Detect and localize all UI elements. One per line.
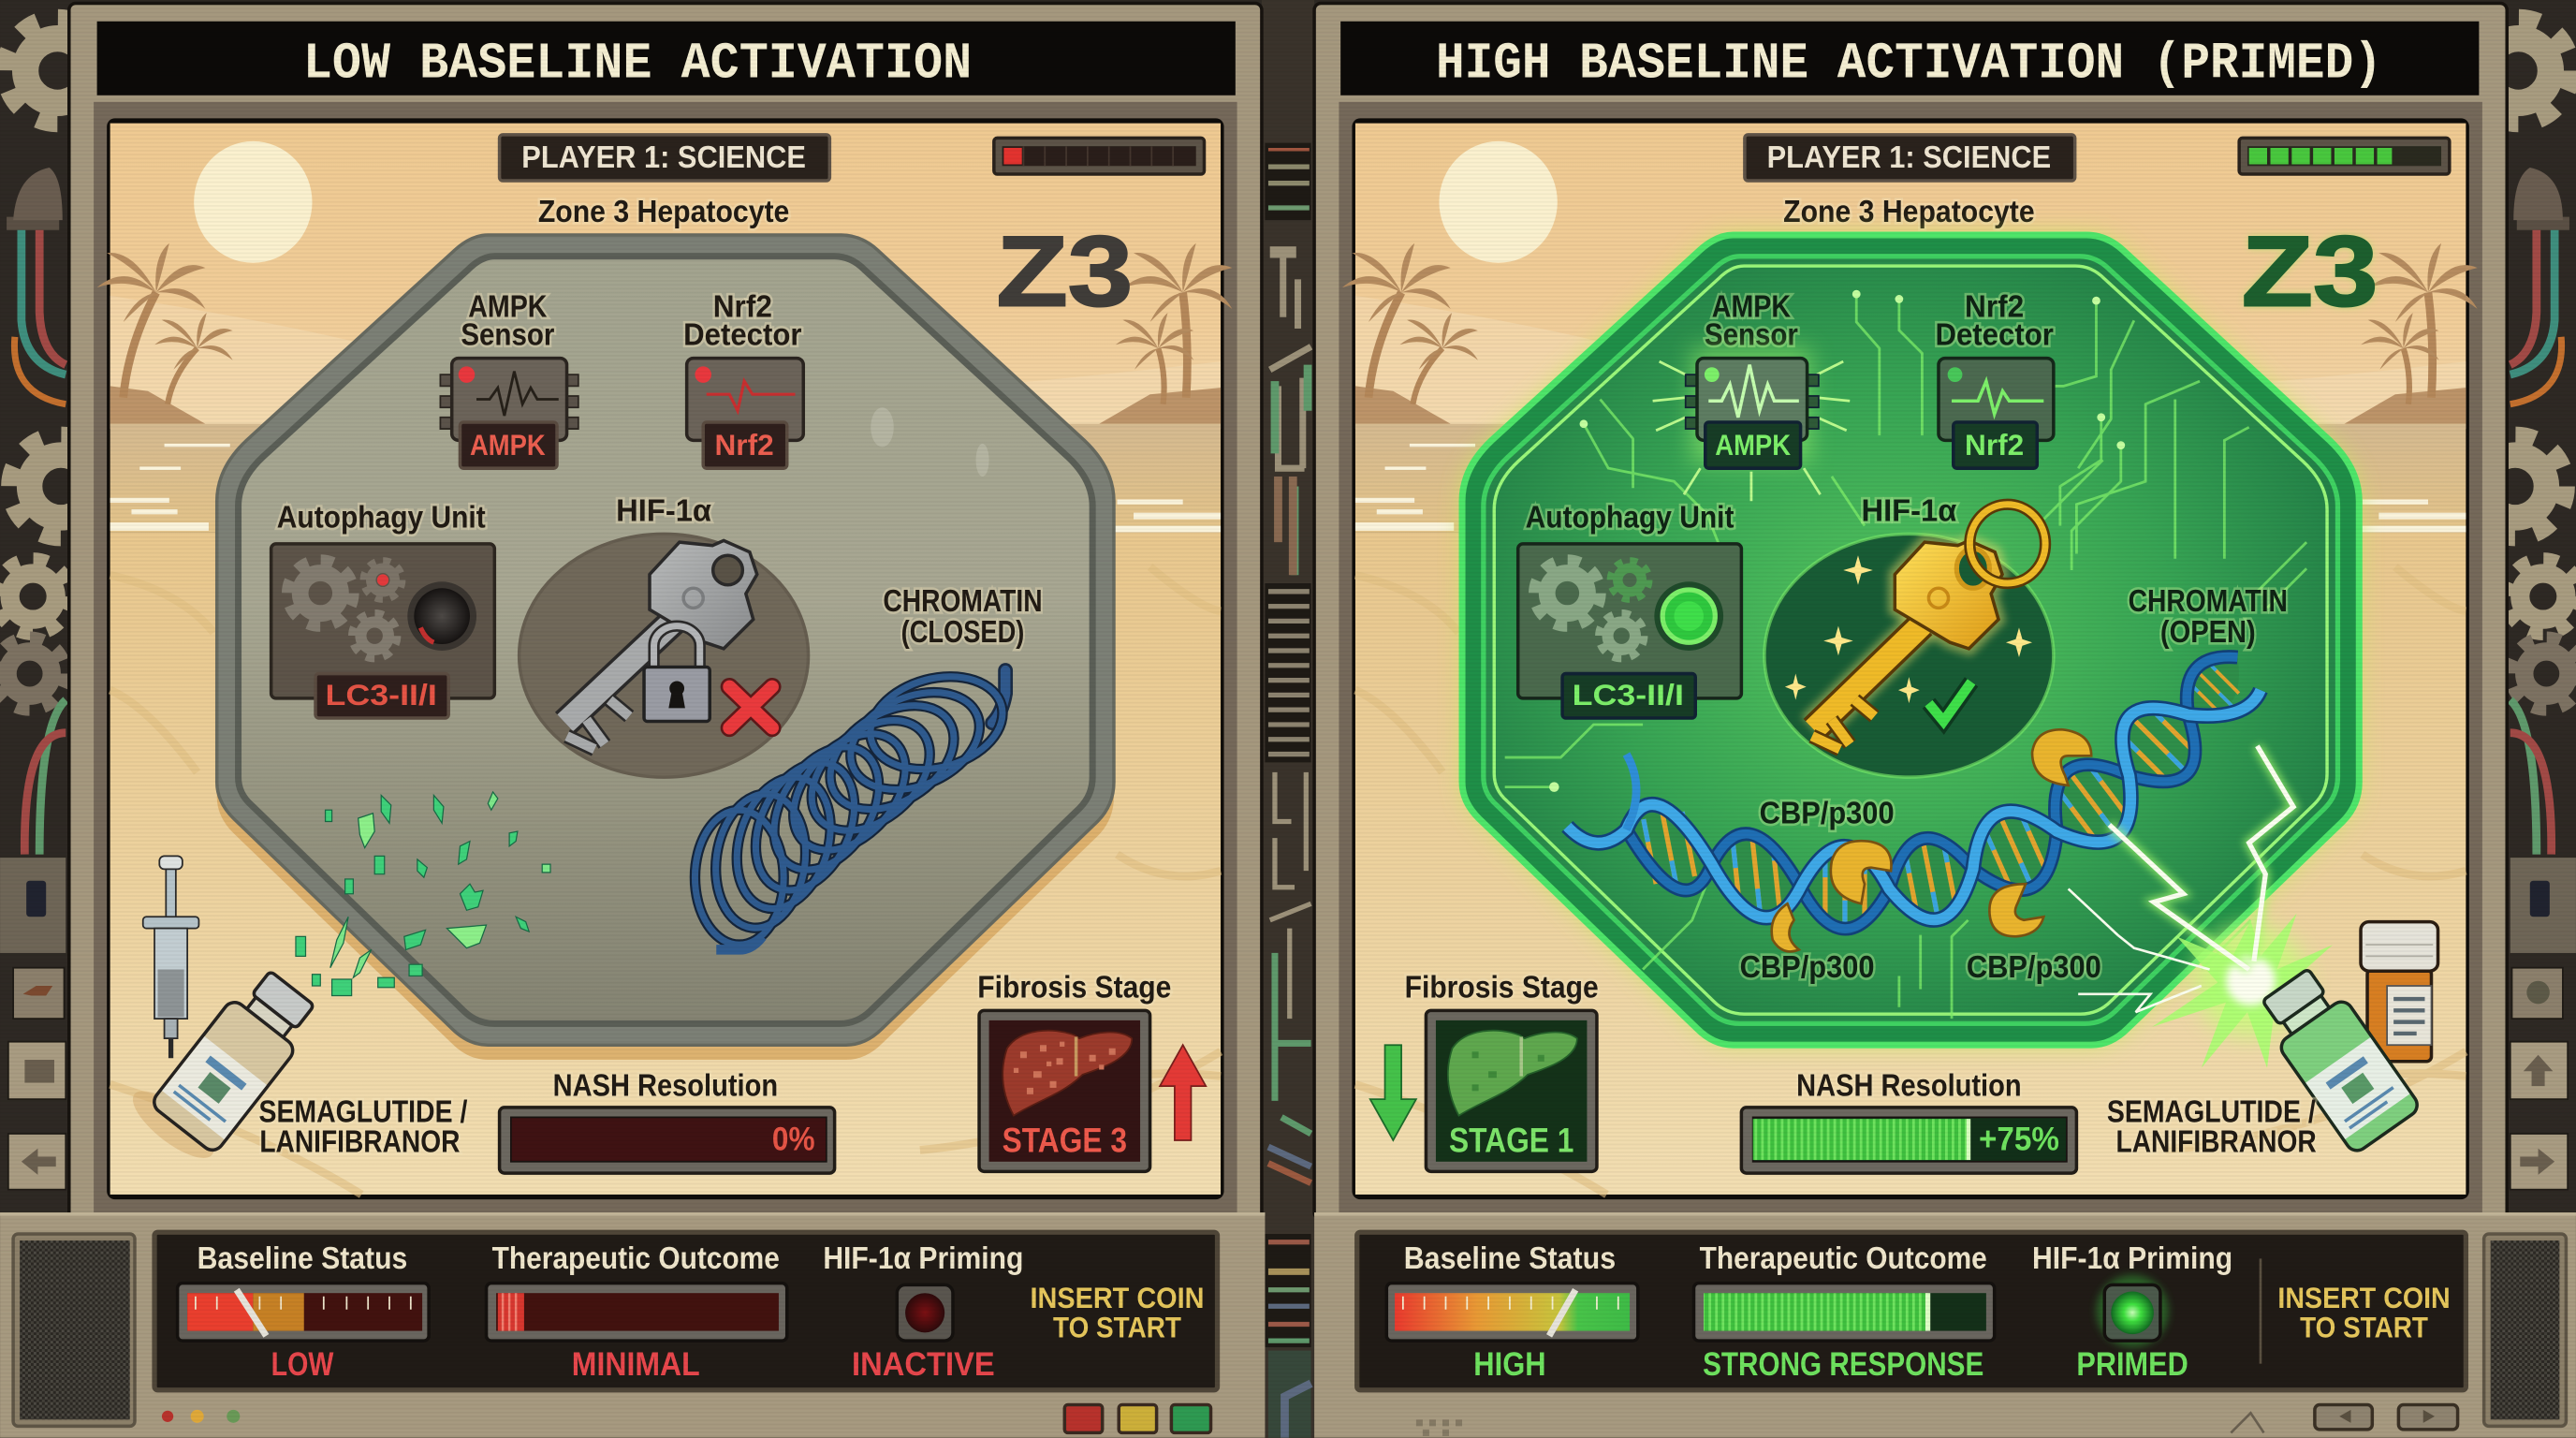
sensor: Nrf2: Nrf2 [714,428,774,462]
speaker: right [2484,1234,2566,1426]
icon: vial [124,952,325,1170]
label: drugs: LANIFIBRANOR [2116,1124,2317,1159]
fibrosis stage 1 card [1405,970,1599,1171]
NASH resolution meter: +75%: +75% [1979,1122,2059,1158]
HIF-1a locked key [520,493,809,777]
lamp: priming inactive: HIF-1α Priming [823,1241,1023,1276]
CBP/p300 co-activators [1740,729,2101,985]
cabinet frame [1314,4,2576,1438]
title [97,22,1236,95]
right side machinery [2464,18,2576,1190]
label: drugs: SEMAGLUTIDE / [2107,1095,2316,1130]
arrow: fibrosis improving [1370,1045,1416,1140]
icon: pill bottle [2361,922,2438,1062]
fibrosis stage 1 card: STAGE 1 [1449,1121,1573,1159]
player badge: PLAYER 1: SCIENCE [1767,140,2051,175]
meter: therapeutic strong [1693,1241,1995,1383]
hepatocyte cell: dormant [217,235,1114,1060]
player badge: PLAYER 1: SCIENCE [521,140,806,175]
lamp: priming active [2032,1241,2232,1383]
status console [1357,1232,2466,1390]
health bar: low [994,138,1204,174]
left side machinery [0,18,112,1190]
HIF-1a golden key: HIF-1α [1862,493,1957,528]
NASH resolution meter: 0% [500,1069,835,1173]
health bar: high [2239,138,2450,174]
sensor: Nrf2 [683,290,803,468]
sensor: AMPK active [1653,290,1850,501]
gauge: baseline low: LOW [271,1346,334,1383]
autophagy unit: on: Autophagy Unit [1526,500,1734,535]
panel: low baseline [0,4,1265,1438]
chromatin closed coil: CHROMATIN [883,584,1043,619]
autophagy unit: on: LC3-II/I [1573,678,1684,712]
chromatin open DNA helix: CHROMATIN [2129,584,2288,619]
title: LOW BASELINE ACTIVATION [303,36,972,93]
fibrosis stage 3 card [977,970,1171,1171]
prompt: insert coin: INSERT COIN [2277,1281,2451,1314]
NASH resolution meter: 0%: NASH Resolution [553,1069,778,1104]
hepatocyte cell: primed [1462,235,2359,1045]
label: drugs [258,1095,467,1159]
chromatin closed coil [695,584,1043,949]
autophagy unit: off [271,500,494,718]
meter: therapeutic strong: STRONG RESPONSE [1703,1346,1983,1383]
label: zone: Zone 3 Hepatocyte [1783,195,2035,229]
lamp: priming active: HIF-1α Priming [2032,1241,2232,1276]
gauge: baseline high [1386,1241,1638,1383]
arcade screen scene [97,118,1232,1199]
CBP/p300 co-activators: CBP/p300 [1967,950,2101,985]
sensor: Nrf2: Nrf2 [713,290,772,325]
gauge: baseline high: HIGH [1473,1346,1546,1383]
HIF-1a locked key: HIF-1α [616,493,711,528]
lightning burst [2069,746,2333,1068]
gauge: baseline high: Baseline Status [1404,1241,1616,1276]
NASH resolution meter: 0%: 0% [772,1122,815,1158]
lamp: priming active: PRIMED [2076,1346,2188,1383]
panel: high baseline primed [1314,4,2576,1438]
gauge: baseline low [178,1241,429,1383]
meter: therapeutic strong: Therapeutic Outcome [1700,1241,1987,1276]
NASH resolution meter: +75%: NASH Resolution [1796,1069,2022,1104]
label: drugs: LANIFIBRANOR [259,1124,460,1159]
speaker: left [13,1234,135,1426]
label: drugs [2107,1095,2317,1159]
autophagy unit: off: Autophagy Unit [277,500,486,535]
zone badge: Z3 [2242,214,2378,327]
icon: scarred liver [1003,1031,1132,1116]
lamp: priming inactive [823,1241,1023,1383]
label: zone: Zone 3 Hepatocyte [538,195,789,229]
label: drugs: SEMAGLUTIDE / [258,1095,467,1130]
meter: therapeutic minimal: MINIMAL [572,1346,700,1383]
meter: therapeutic minimal [487,1241,787,1383]
circuit traces [1505,294,2306,1019]
fibrosis stage 3 card: Fibrosis Stage [977,970,1171,1005]
center connector strip [1262,0,1314,1438]
sensor: AMPK active: AMPK [1715,428,1791,462]
fibrosis stage 3 card: STAGE 3 [1003,1121,1127,1159]
title [1340,22,2479,95]
cabinet buttons: left [162,1405,1211,1432]
cabinet buttons: right [1416,1405,2458,1436]
sensor: Nrf2 active: Nrf2 [1965,290,2024,325]
sensor: AMPK [440,290,578,468]
autophagy unit: off: LC3-II/I [326,678,437,712]
prompt: insert coin [1030,1281,1204,1344]
arcade screen scene [1342,118,2478,1199]
prompt: insert coin: TO START [1053,1311,1181,1344]
chromatin open DNA helix: (OPEN) [2160,615,2256,650]
chromatin open DNA helix [1567,584,2288,985]
sensor: AMPK: AMPK [470,428,546,462]
icon: healthy liver [1448,1031,1577,1116]
sensor: AMPK active: Sensor [1705,318,1798,353]
sensor: AMPK active: AMPK [1712,290,1791,325]
fibrosis stage 1 card: Fibrosis Stage [1405,970,1599,1005]
zone badge: Z3 [2242,214,2378,327]
prompt: insert coin: INSERT COIN [1030,1281,1204,1314]
icon: syringe [143,856,198,1058]
cabinet frame [0,4,1265,1438]
failed drug shards [296,792,550,996]
meter: therapeutic minimal: Therapeutic Outcome [492,1241,780,1276]
CBP/p300 co-activators: CBP/p300 [1760,796,1895,830]
sensor: Nrf2 active: Detector [1935,318,2054,353]
title: HIGH BASELINE ACTIVATION (PRIMED) [1436,36,2382,93]
prompt: insert coin: TO START [2300,1311,2428,1344]
chromatin closed coil: (CLOSED) [901,615,1024,650]
gauge: baseline low: Baseline Status [198,1241,407,1276]
zone badge: Z3 [996,214,1133,327]
sensor: AMPK: AMPK [468,290,547,325]
lamp: priming inactive: INACTIVE [852,1346,995,1383]
icon: vial glowing [2251,961,2422,1155]
CBP/p300 co-activators: CBP/p300 [1740,950,1875,985]
HIF-1a golden key [1764,493,2054,777]
sensor: Nrf2: Detector [683,318,802,353]
sensor: Nrf2 active [1935,290,2054,468]
NASH resolution meter: +75% [1741,1069,2076,1173]
status console [154,1232,1218,1390]
sensor: AMPK: Sensor [461,318,554,353]
sensor: Nrf2 active: Nrf2 [1965,428,2024,462]
prompt: insert coin [2277,1281,2451,1344]
autophagy unit: on [1518,500,1741,718]
arrow: fibrosis worsening [1160,1045,1206,1140]
